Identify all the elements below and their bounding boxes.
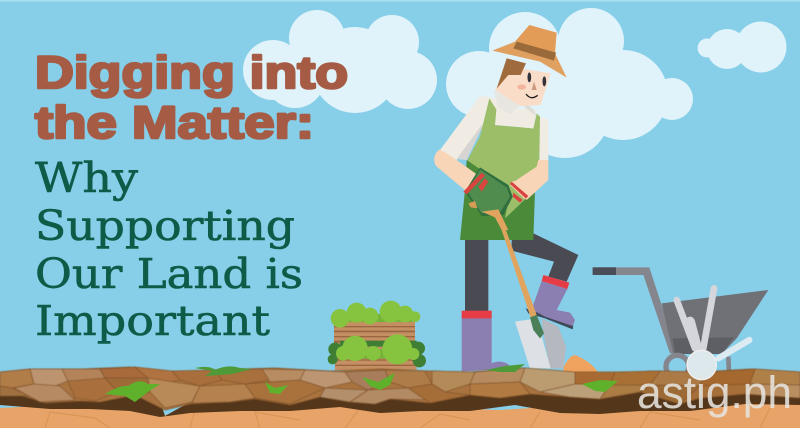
cloud: right — [698, 22, 786, 72]
logo wordmark: astig.ph — [637, 367, 792, 418]
subtitle: Why Supporting Our Land is Important: Our Land is — [35, 250, 303, 298]
title: Digging into the Matter: the Matter: — [35, 97, 314, 148]
ground: cracked stone layer — [0, 367, 800, 410]
title: Digging into the Matter — [35, 47, 348, 148]
wheelbarrow — [593, 267, 768, 378]
logo icon: hand and magnifier — [677, 288, 749, 380]
head with hat — [492, 25, 567, 106]
astig.ph logo — [637, 288, 792, 418]
shovel handle and socket — [498, 220, 544, 338]
subtitle: Why Supporting Our Land is Important: Supporting — [35, 202, 295, 250]
legs and boots — [462, 233, 598, 373]
subtitle: Why Supporting Our Land is Important: Important — [35, 297, 271, 345]
title: Digging into the Matter: Digging into — [35, 47, 348, 98]
plants — [105, 364, 618, 402]
ground: dark soil band — [0, 390, 800, 417]
crate with seedlings — [328, 301, 426, 370]
ground: subsoil — [0, 403, 800, 428]
cloud: left — [243, 10, 437, 113]
ground: soil cracks — [45, 408, 770, 428]
torso, apron and arms — [434, 90, 548, 240]
subtitle: Why Supporting Our Land is Important — [35, 154, 303, 345]
cloud: centre — [446, 8, 693, 158]
gardener — [434, 25, 598, 373]
subtitle: Why Supporting Our Land is Important: Why — [35, 154, 139, 202]
